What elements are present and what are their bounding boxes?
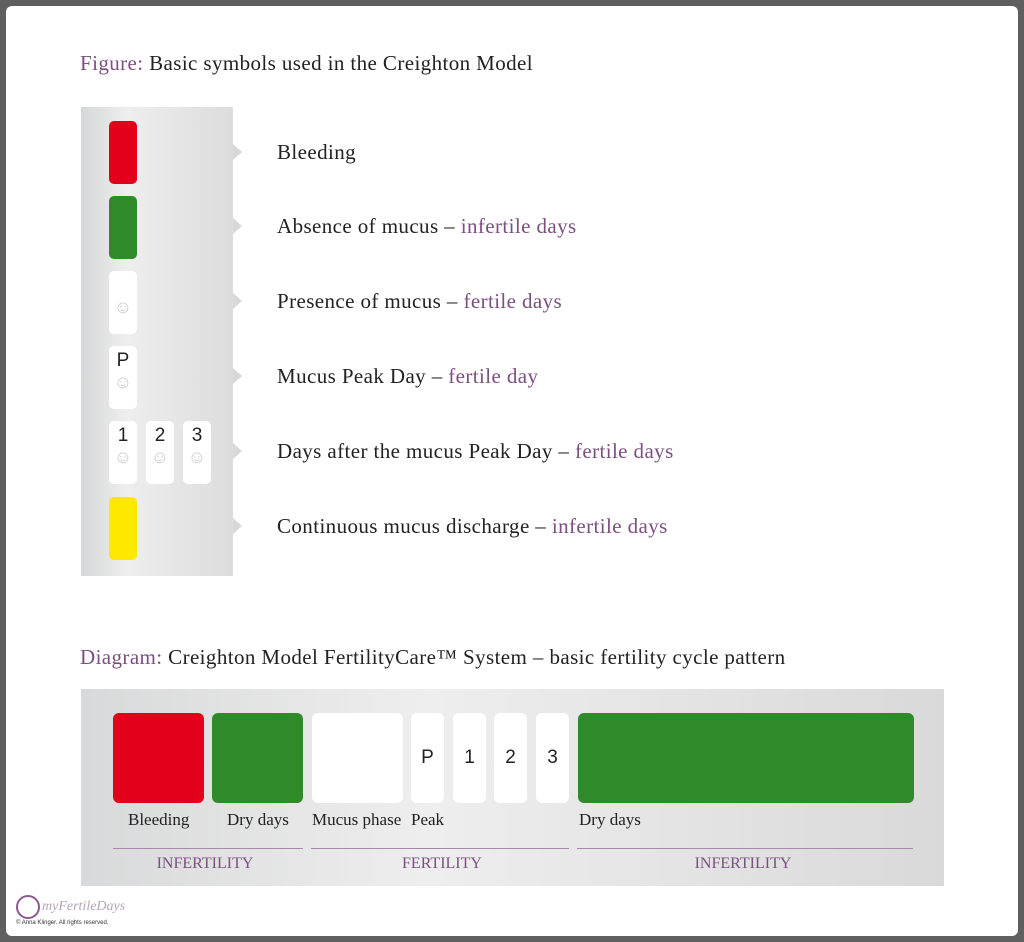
text: 2 (505, 747, 516, 768)
symbols: 1 2 3: 1 (118, 425, 128, 446)
text: Peak (411, 810, 444, 829)
logo (16, 895, 125, 926)
title: diagram: Diagram: Creighton Model FertilityCare™ System – basic fertility cycle pattern (80, 645, 786, 669)
text: Dry days (227, 810, 289, 829)
symbols: 1 2 3: ☺ (151, 447, 169, 467)
text: Mucus Peak Day – fertile day (277, 364, 538, 388)
symbol: continuous (109, 497, 137, 560)
text: FERTILITY (402, 855, 482, 872)
text: Mucus phase (312, 810, 401, 829)
text: 1 (464, 747, 475, 768)
symbols: 1 2 3: 2 (155, 425, 165, 446)
text: INFERTILITY (157, 855, 253, 872)
symbol: bleeding (109, 121, 137, 184)
text: Continuous mucus discharge – infertile days (277, 514, 668, 538)
symbol: mucus: ☺ (114, 297, 132, 317)
text: 3 (547, 747, 558, 768)
text: P (421, 747, 434, 768)
panel: symbols (81, 107, 233, 576)
symbols: 1 2 3 (109, 421, 211, 484)
text: Days after the mucus Peak Day – fertile days (277, 439, 674, 463)
labels: Bleeding (277, 140, 356, 164)
text: Dry days (579, 810, 641, 829)
logo: myFertileDays (42, 899, 125, 914)
symbol: mucus (109, 271, 137, 334)
symbols: 1 2 3: ☺ (114, 447, 132, 467)
symbol: peak (109, 346, 137, 409)
symbol: dry (109, 196, 137, 259)
symbol: peak: P (117, 350, 129, 371)
text: Bleeding (128, 810, 189, 829)
panel: cycle diagram (81, 689, 944, 886)
symbols: 1 2 3: ☺ (188, 447, 206, 467)
text: Absence of mucus – infertile days (277, 214, 577, 238)
logo: © Anna Klinger. All rights reserved. (16, 920, 108, 926)
text: Presence of mucus – fertile days (277, 289, 562, 313)
symbol: peak: ☺ (114, 372, 132, 392)
text: INFERTILITY (695, 855, 791, 872)
symbols: 1 2 3: 3 (192, 425, 202, 446)
title: figure: Figure: Basic symbols used in the Creighton Model (80, 51, 533, 75)
